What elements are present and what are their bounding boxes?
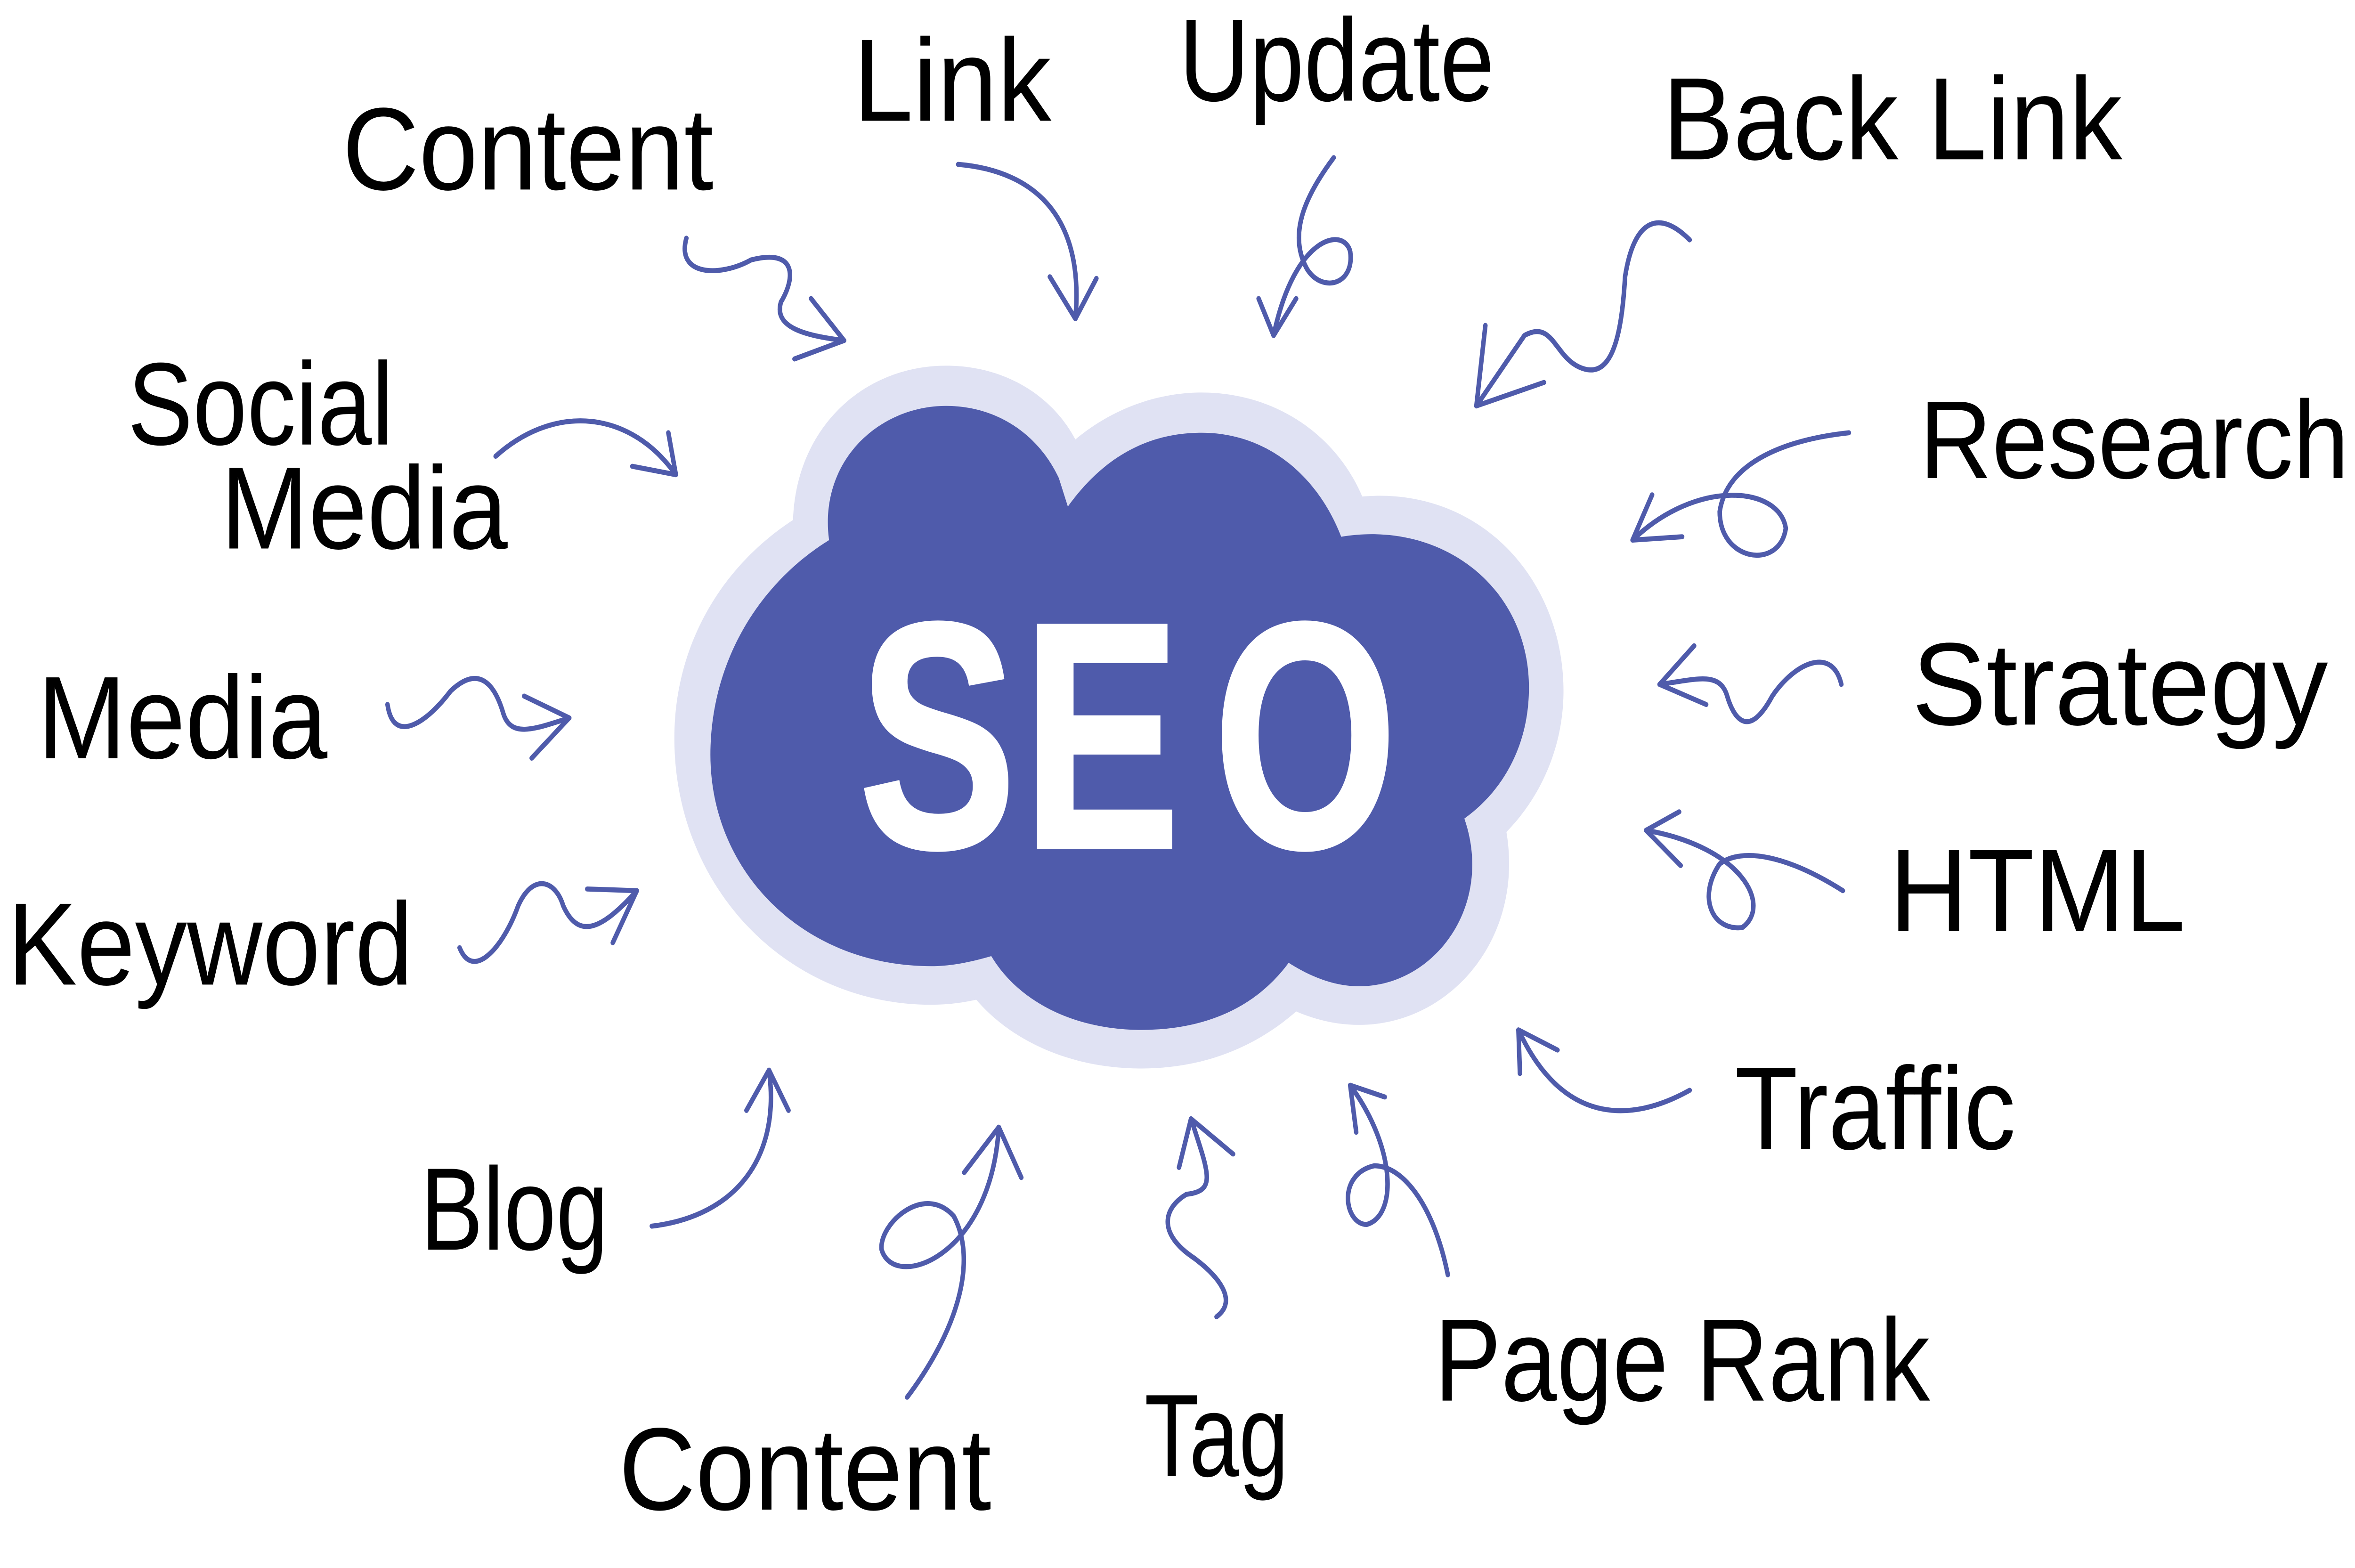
arrow: Media left — [388, 678, 569, 758]
arrow: Research — [1632, 433, 1849, 555]
arrow: Back Link — [1477, 223, 1689, 406]
arrow: Content top — [685, 238, 844, 359]
label: Social Media: Media — [221, 443, 508, 574]
arrow: Blog — [652, 1070, 788, 1226]
label: Media left: Media — [38, 652, 328, 783]
cloud: light outer halo — [674, 366, 1564, 1068]
label: Content bottom: Content — [619, 1404, 991, 1535]
label: Research: Research — [1919, 378, 2349, 502]
cloud: blue main shape — [710, 406, 1529, 1030]
arrow: Traffic — [1519, 1030, 1689, 1111]
arrow: Tag — [1168, 1119, 1233, 1317]
label: Tag: Tag — [1145, 1370, 1289, 1502]
label: Content top: Content — [342, 84, 714, 215]
arrow: Keyword — [460, 884, 637, 961]
label: Keyword: Keyword — [8, 879, 413, 1010]
label: HTML: HTML — [1889, 825, 2185, 956]
arrow: Link — [958, 164, 1096, 319]
label: Strategy: Strategy — [1912, 619, 2328, 750]
label: Social Media: Social — [128, 339, 393, 470]
arrow: Social Media — [495, 421, 676, 475]
arrow: Content bottom — [882, 1127, 1021, 1397]
label: Blog: Blog — [421, 1144, 608, 1275]
arrow: Update — [1259, 158, 1351, 335]
arrow: Page Rank — [1348, 1085, 1448, 1275]
label: Back Link: Back Link — [1663, 54, 2122, 185]
label: Page Rank: Page Rank — [1434, 1295, 1930, 1426]
arrow: HTML — [1646, 812, 1843, 928]
label: Link: Link — [853, 15, 1052, 146]
arrow: Strategy — [1660, 646, 1841, 722]
label: Social Media — [128, 339, 508, 574]
title: SEO: SEO — [859, 556, 1397, 916]
label: Traffic: Traffic — [1735, 1043, 2015, 1174]
